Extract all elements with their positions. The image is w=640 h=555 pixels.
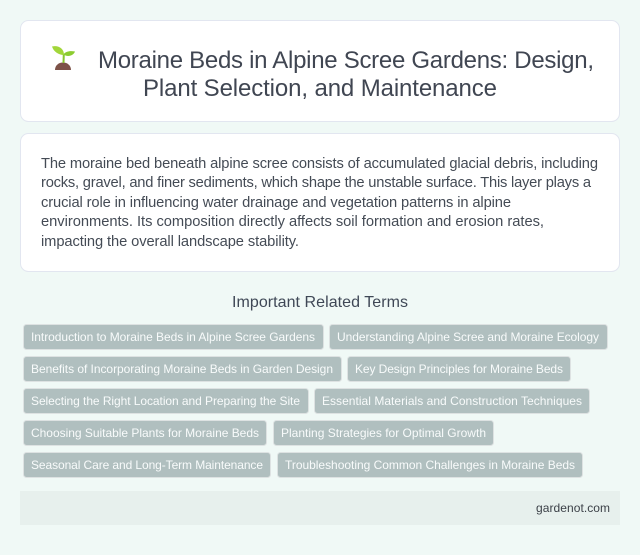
heading: related terms: Important Related Terms [232, 294, 408, 311]
tag: selecting [24, 388, 308, 414]
panel: description: crucial role in influencing water drainage and vegetation patterns in alpine [41, 195, 511, 211]
title: Moraine Beds in Alpine Scree Gardens: Design, [98, 47, 594, 74]
tag: understanding: Understanding Alpine Scree and Moraine Ecology [337, 330, 599, 344]
tag: troubleshooting: Troubleshooting Common Challenges in Moraine Beds [285, 458, 575, 472]
tag: benefits: Benefits of Incorporating Moraine Beds in Garden Design [31, 362, 333, 376]
panel: description [20, 134, 620, 272]
title [98, 47, 594, 102]
tag: plants: Choosing Suitable Plants for Moraine Beds [31, 426, 259, 440]
tag: seasonal [24, 452, 270, 478]
panel: description: rocks, gravel, and finer sediments, which shape the unstable surface. This layer plays a [41, 175, 592, 191]
tag: selecting: Selecting the Right Location and Preparing the Site [31, 394, 300, 408]
panel: description: environments. Its composition directly affects soil formation and erosion rates, [41, 214, 544, 230]
panel: description: impacting the overall landscape stability. [41, 234, 299, 250]
panel: description: The moraine bed beneath alpine scree consists of accumulated glacial debris, including [41, 156, 598, 172]
tag: seasonal: Seasonal Care and Long-Term Maintenance [31, 458, 263, 472]
tag: benefits [24, 356, 342, 382]
tag: troubleshooting [278, 452, 582, 478]
footer: gardenot.com [536, 501, 610, 515]
tag: materials: Essential Materials and Construction Techniques [322, 394, 582, 408]
tag: key design [348, 356, 570, 382]
tag: planting [274, 420, 494, 446]
panel: title card [20, 20, 620, 122]
tag: introduction: Introduction to Moraine Beds in Alpine Scree Gardens [31, 330, 315, 344]
tag: key design: Key Design Principles for Moraine Beds [355, 362, 563, 376]
icon: seedling [52, 46, 75, 70]
footer [20, 491, 620, 525]
tag: plants [24, 420, 266, 446]
tag: planting: Planting Strategies for Optimal Growth [281, 426, 486, 440]
tag: understanding [330, 324, 608, 350]
tag: materials [314, 388, 590, 414]
title: Plant Selection, and Maintenance [143, 75, 497, 102]
tag: introduction [24, 324, 324, 350]
